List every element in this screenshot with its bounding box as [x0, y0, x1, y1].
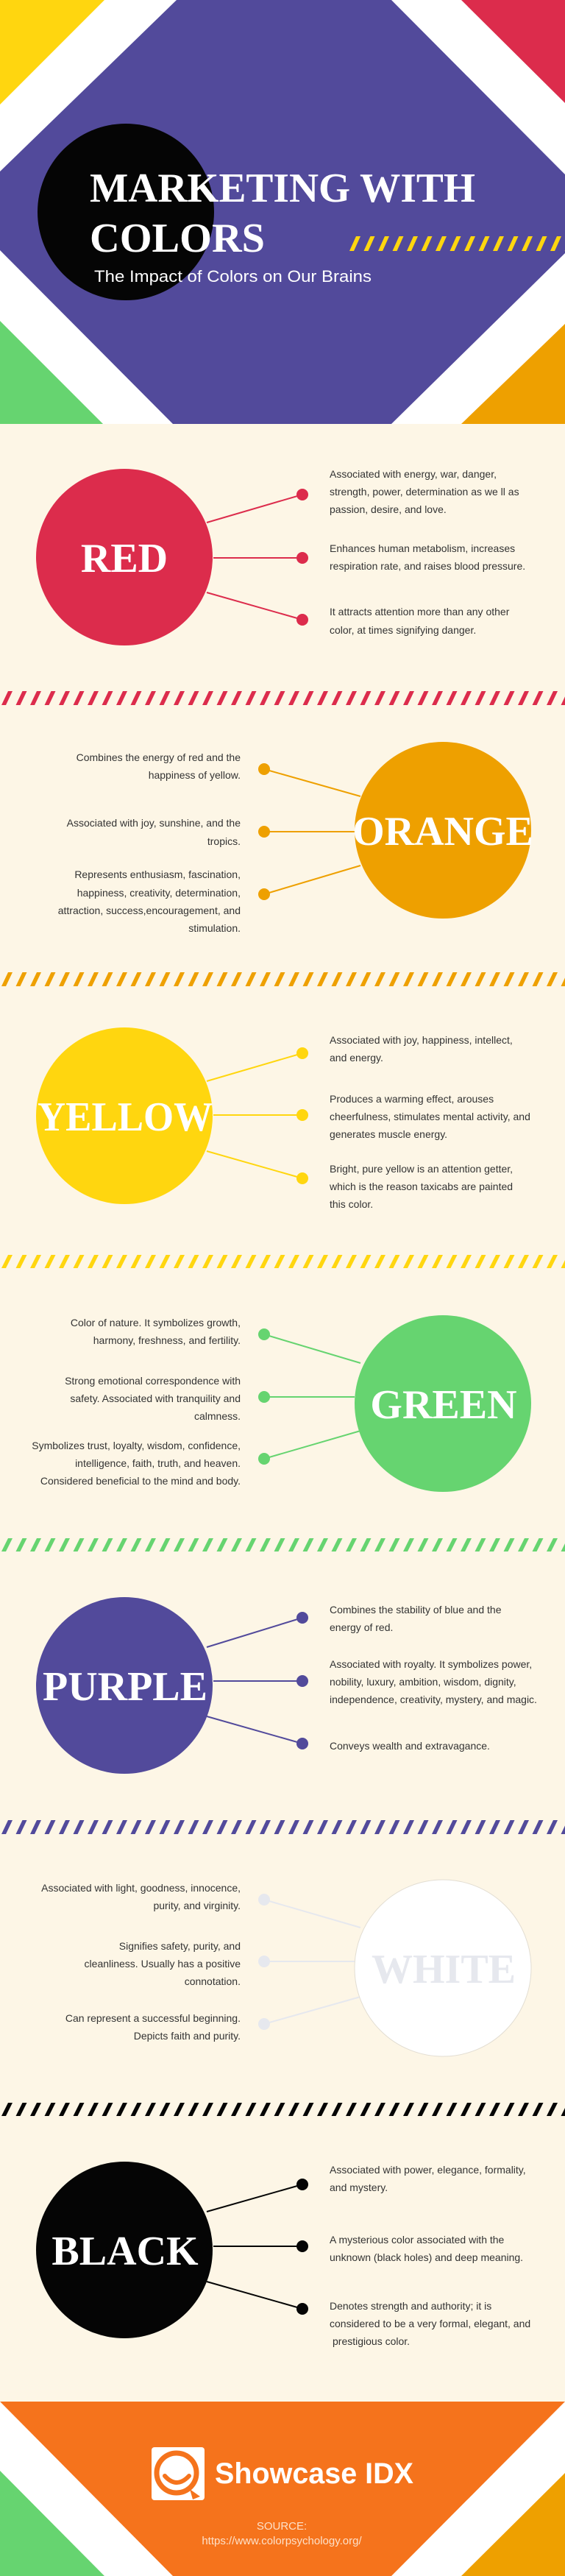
section: purple: independence, creativity, mystery, and magic. [330, 1694, 537, 1705]
section: orange: tropics. [207, 835, 241, 847]
section: orange: stimulation. [188, 922, 241, 934]
footer [0, 2402, 565, 2576]
section: white: Associated with light, goodness, innocence, [41, 1882, 241, 1894]
section: black: and mystery. [330, 2182, 388, 2193]
source: SOURCE: [257, 2520, 307, 2533]
section: white [41, 1880, 531, 2056]
section: purple: PURPLE [43, 1664, 207, 1710]
section: white: connotation. [185, 1975, 241, 1987]
section: red: passion, desire, and love. [330, 503, 447, 515]
title: MARKETING WITH [90, 166, 475, 211]
section: orange: happiness of yellow. [149, 769, 241, 781]
source: https://www.colorpsychology.org/ [202, 2535, 362, 2547]
section: yellow: cheerfulness, stimulates mental activity, and [330, 1111, 530, 1122]
section: orange: Associated with joy, sunshine, and the [67, 817, 241, 829]
section: purple: Combines the stability of blue and the [330, 1604, 502, 1616]
section: green: Strong emotional correspondence with [65, 1375, 241, 1387]
section: green: Symbolizes trust, loyalty, wisdom, confidence, [32, 1440, 241, 1451]
section: orange [58, 742, 533, 934]
section: black: unknown (black holes) and deep meaning. [330, 2251, 523, 2263]
section: black: considered to be a very formal, elegant, and [330, 2318, 530, 2329]
section: yellow: which is the reason taxicabs are painted [329, 1181, 513, 1192]
section: black [36, 2162, 530, 2347]
subtitle: The Impact of Colors on Our Brains [94, 267, 372, 286]
section: purple: Associated with royalty. It symbolizes power, [330, 1658, 532, 1670]
header [0, 0, 565, 424]
section: white: purity, and virginity. [153, 1900, 241, 1911]
section: black: Associated with power, elegance, formality, [330, 2164, 526, 2176]
section: red: It attracts attention more than any other [330, 606, 510, 618]
section: green: Color of nature. It symbolizes growth, [71, 1317, 241, 1328]
section: yellow: and energy. [330, 1052, 383, 1064]
section: green: harmony, freshness, and fertility. [93, 1334, 241, 1346]
section: orange: Combines the energy of red and the [77, 751, 241, 763]
brand name: Showcase IDX [215, 2458, 413, 2490]
section: red: color, at times signifying danger. [330, 624, 476, 636]
section: red [36, 468, 525, 645]
section: red: respiration rate, and raises blood pressure. [330, 560, 525, 572]
section: purple: nobility, luxury, ambition, wisdom, dignity, [330, 1676, 516, 1688]
section: yellow: this color. [330, 1198, 373, 1210]
section: orange: Represents enthusiasm, fascination, [74, 868, 241, 880]
source [202, 2520, 362, 2547]
section: black: A mysterious color associated with the [330, 2234, 505, 2246]
section: orange: ORANGE [352, 809, 533, 854]
section: orange: attraction, success,encouragement, and [58, 905, 241, 916]
section: green: safety. Associated with tranquility and [70, 1393, 241, 1404]
section: white: cleanliness. Usually has a positive [85, 1958, 241, 1970]
section: white: WHITE [372, 1947, 516, 1992]
icon: logo [152, 2447, 205, 2500]
section: red: RED [81, 536, 168, 581]
section: yellow: YELLOW [38, 1094, 213, 1140]
section: green: GREEN [370, 1382, 517, 1428]
section: green: intelligence, faith, truth, and heaven. [75, 1457, 241, 1469]
header: COLORS [90, 216, 265, 261]
section: yellow: Produces a warming effect, arouses [330, 1093, 494, 1105]
section: yellow: generates muscle energy. [330, 1128, 447, 1140]
section: red: strength, power, determination as we ll as [330, 486, 519, 498]
section: purple [36, 1597, 537, 1774]
section: yellow [36, 1027, 530, 1210]
section: yellow: Associated with joy, happiness, intellect, [330, 1034, 513, 1046]
section: purple: Conveys wealth and extravagance. [330, 1740, 490, 1752]
section: black: prestigious color. [333, 2335, 410, 2347]
section: white: Signifies safety, purity, and [119, 1940, 241, 1952]
section: purple: energy of red. [330, 1621, 393, 1633]
section: green: Considered beneficial to the mind and body. [40, 1475, 241, 1487]
section: yellow: Bright, pure yellow is an attention getter, [330, 1163, 513, 1175]
section: red: Associated with energy, war, danger, [330, 468, 497, 480]
section: red: Enhances human metabolism, increases [330, 542, 515, 554]
section: white: Depicts faith and purity. [134, 2030, 241, 2042]
section: green [32, 1315, 531, 1492]
section: black: BLACK [51, 2229, 199, 2274]
section: orange: happiness, creativity, determination, [77, 887, 241, 899]
section: green: calmness. [194, 1410, 241, 1422]
section: black: Denotes strength and authority; it is [330, 2300, 491, 2312]
section: white: Can represent a successful beginning. [65, 2012, 241, 2024]
